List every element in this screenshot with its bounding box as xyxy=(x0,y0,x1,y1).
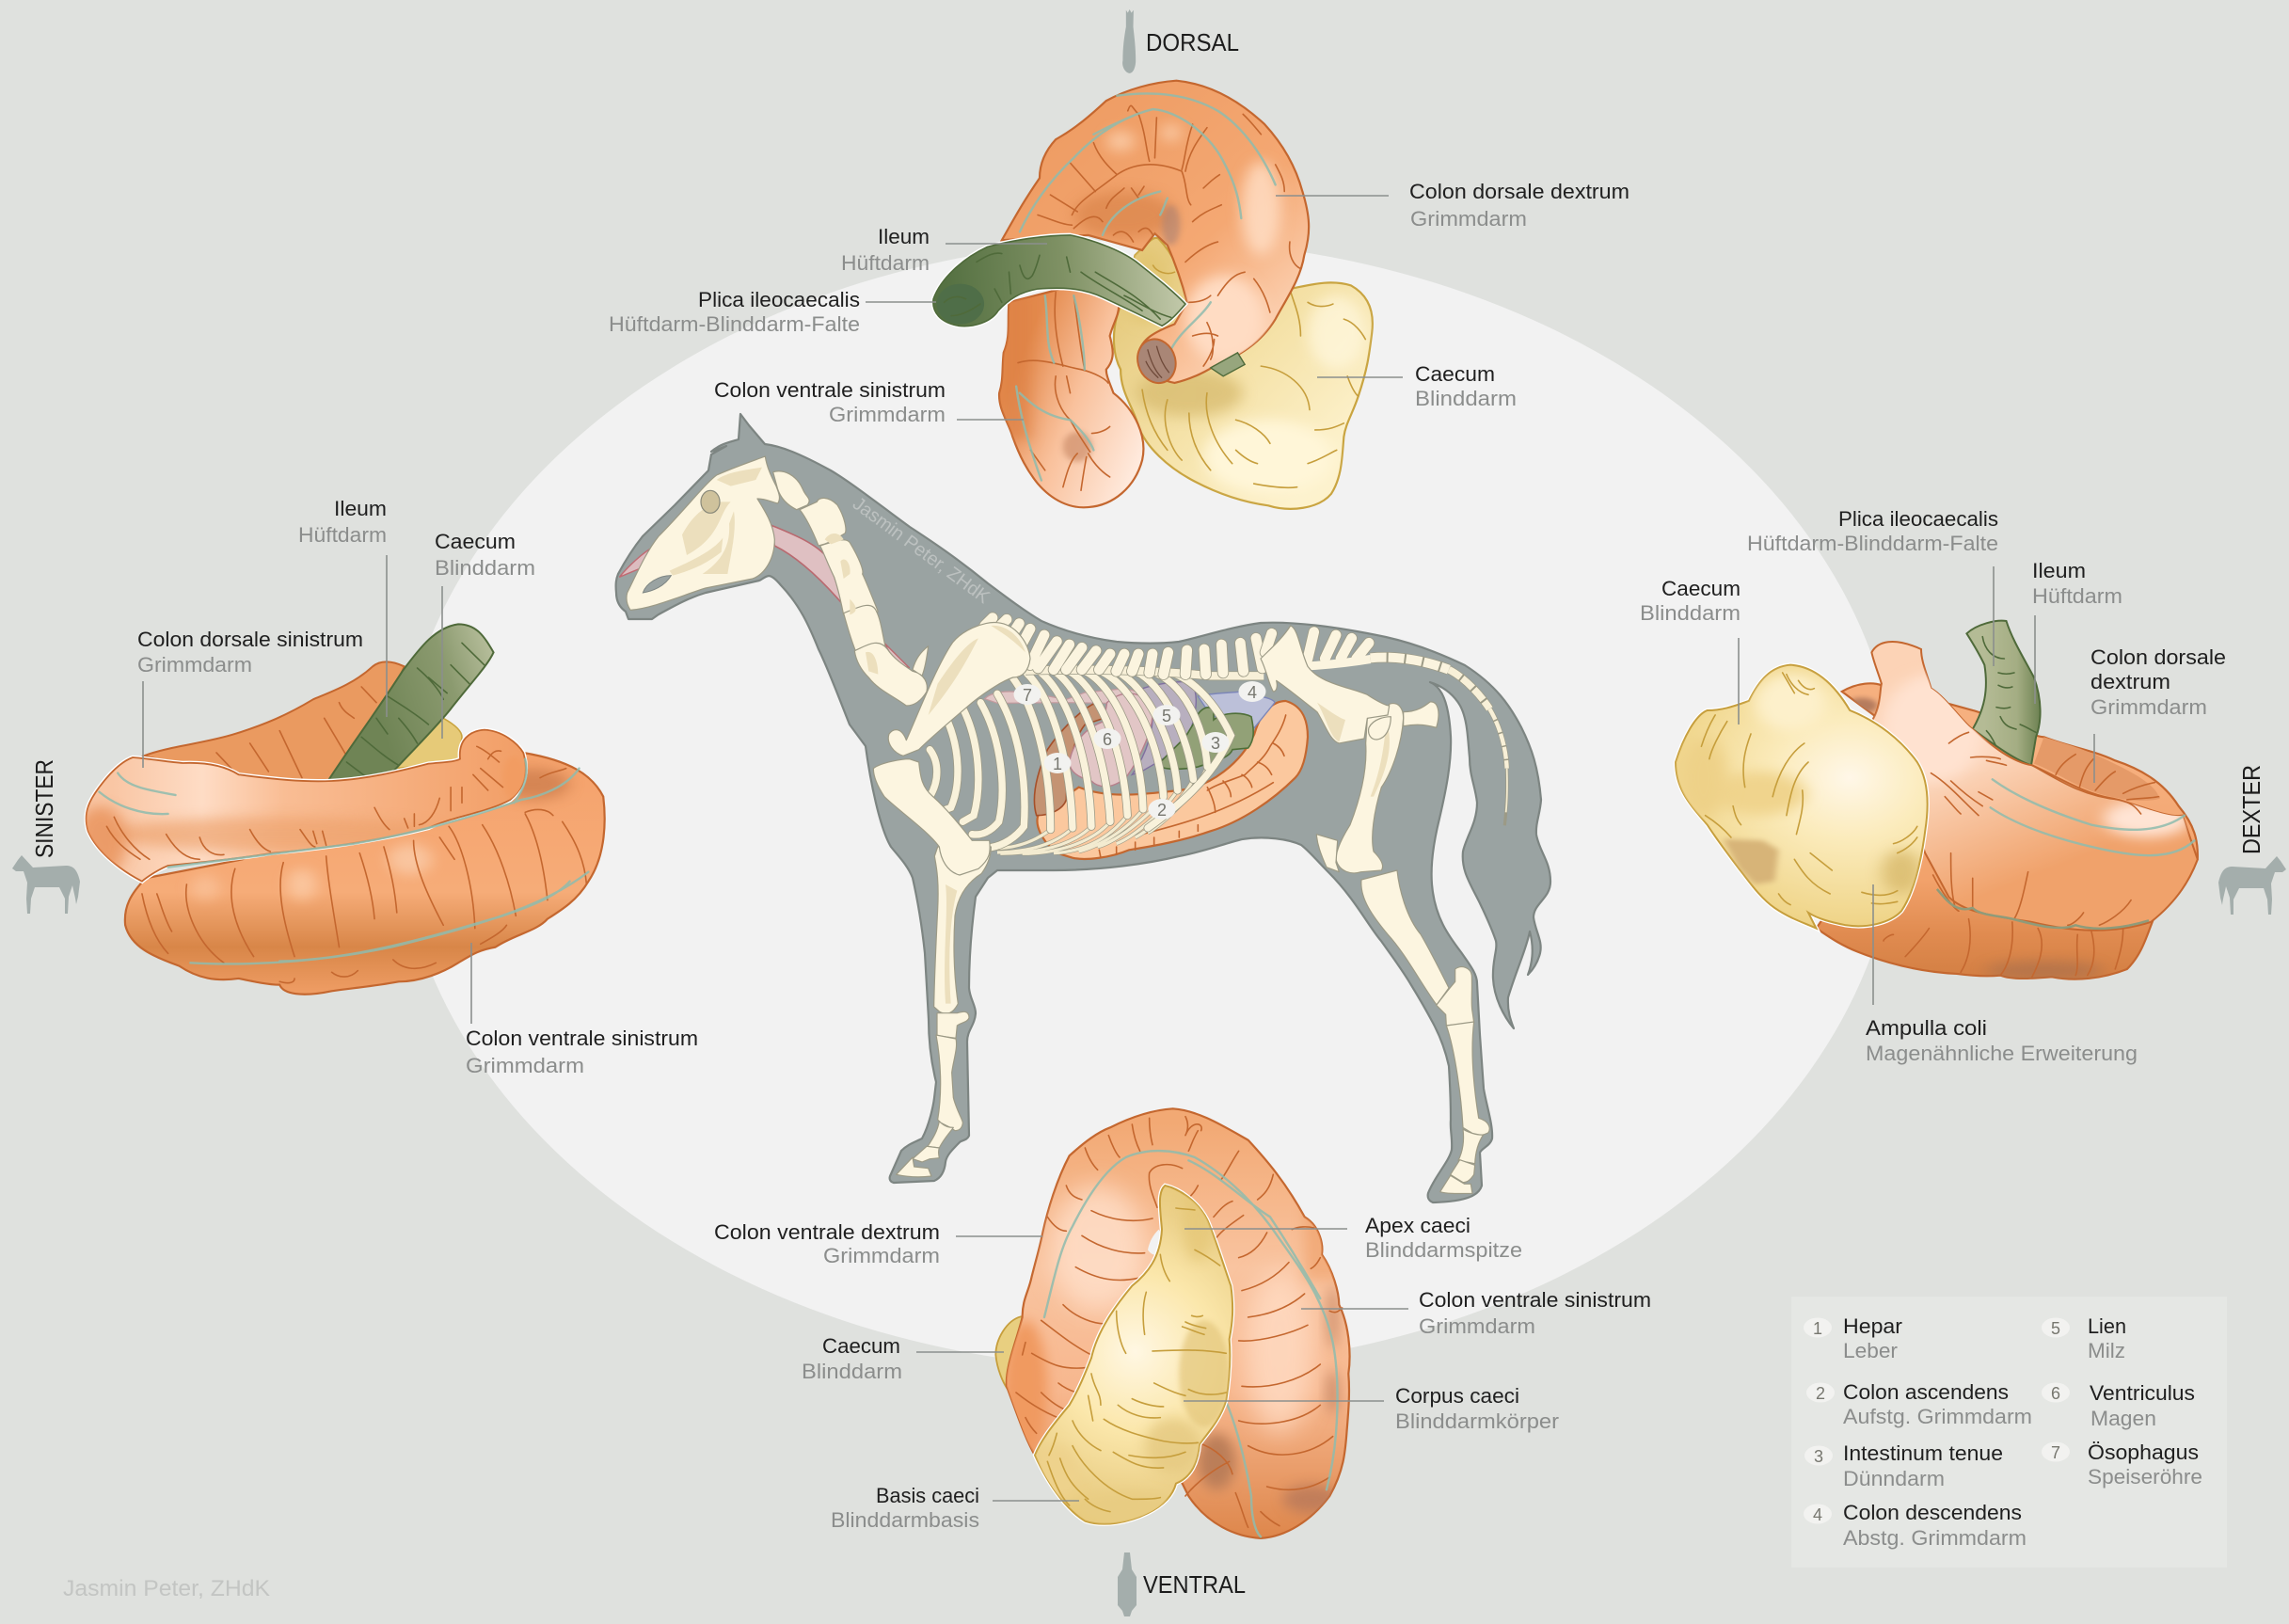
colon dorsale dextrum xyxy=(1002,81,1309,387)
leader: colon dorsale (dexter) xyxy=(2093,734,2095,783)
stomach xyxy=(1070,693,1152,787)
legend item 5 xyxy=(2042,1314,2126,1362)
icon: horse, dexter side xyxy=(2218,856,2286,915)
label: colon dorsale dextrum (dorsal): Grimmdarm xyxy=(1410,207,1527,231)
legend item 2 xyxy=(1806,1380,2032,1428)
leader: basis caeci xyxy=(993,1500,1079,1502)
label: caecum (ventral): Caecum xyxy=(822,1334,900,1358)
leader: ampulla coli xyxy=(1872,884,1874,1005)
heading: ventral: VENTRAL xyxy=(1143,1570,1246,1599)
colon ascendens xyxy=(1037,701,1308,859)
legend item 1: Hepar xyxy=(1843,1314,1902,1338)
central light ellipse xyxy=(397,240,1899,1369)
label: colon ventrale sinistrum (dorsal) xyxy=(714,378,946,426)
label: apex caeci: Apex caeci xyxy=(1365,1214,1470,1237)
thoracic vertebrae xyxy=(985,618,1264,676)
legend item 6: Ventriculus xyxy=(2090,1381,2195,1405)
legend item 4: Colon descendens xyxy=(1843,1501,2022,1524)
caecum, dorsal view xyxy=(1114,238,1373,509)
label: plica ileocaecalis (dexter): Plica ileocaecalis xyxy=(1838,507,1998,531)
front lower leg bones xyxy=(897,847,991,1177)
legend item 5: 5 xyxy=(2051,1319,2060,1338)
lumbar and tail vertebrae xyxy=(1265,632,1507,825)
pelvis and femur xyxy=(1261,626,1439,873)
label: plica ileocaecalis (dorsal): Plica ileocaecalis xyxy=(698,288,860,311)
ileum, dorsal view xyxy=(933,235,1185,326)
caecum, ventral view xyxy=(1035,1186,1232,1524)
label: ampulla coli xyxy=(1866,1016,2138,1065)
hind lower leg bones xyxy=(1437,967,1489,1194)
icon: horse, sinister side xyxy=(12,855,80,914)
colon opening xyxy=(1133,335,1181,387)
label: colon dorsale dextrum (dexter) xyxy=(2090,645,2226,719)
legend panel xyxy=(1791,1297,2227,1568)
label: colon dorsale sinistrum (sinister) xyxy=(137,628,363,677)
leader: apex caeci xyxy=(1184,1228,1347,1230)
label: colon ventrale sinistrum (ventral): Grimmdarm xyxy=(1419,1314,1535,1338)
colon ventrale sinistrum, dorsal view xyxy=(999,285,1143,507)
tibia xyxy=(1361,870,1449,1005)
rib cartilage xyxy=(994,767,1207,853)
label: colon dorsale dextrum (dorsal): Colon dorsale dextrum xyxy=(1409,180,1629,203)
label: ileum (dorsal): Hüftdarm xyxy=(841,251,930,275)
colon body, right view xyxy=(1816,683,2198,980)
label: colon dorsale dextrum (dorsal) xyxy=(1409,180,1629,231)
rear rim of colon xyxy=(144,661,405,784)
skull xyxy=(619,456,779,610)
numbered markers on the horse: 1 xyxy=(1053,755,1062,773)
label: ileum (dexter): Ileum xyxy=(2032,559,2086,582)
spleen xyxy=(1132,682,1196,774)
label: colon ventrale sinistrum (sinister): Grimmdarm xyxy=(466,1054,584,1077)
legend item 2: Colon ascendens xyxy=(1843,1380,2009,1404)
legend item 7: Ösophagus xyxy=(2088,1441,2199,1464)
legend item 1: 1 xyxy=(1813,1319,1822,1338)
label: caecum (ventral): Blinddarm xyxy=(802,1360,902,1383)
label: colon dorsale sinistrum (sinister): Grimmdarm xyxy=(137,653,252,677)
label: apex caeci xyxy=(1365,1214,1522,1262)
icon: horse from behind (dorsal) xyxy=(1122,9,1136,73)
legend item 5: Milz xyxy=(2088,1339,2125,1362)
numbered markers on the horse: 5 xyxy=(1162,707,1171,725)
organs and ribcage xyxy=(930,618,1308,859)
leader: ileum (sinister) xyxy=(386,555,388,717)
illustration: right lateral view of the colon xyxy=(1676,621,2198,980)
leader: caecum (dorsal) xyxy=(1317,376,1403,378)
label: corpus caeci xyxy=(1395,1384,1559,1433)
leader: plica (dexter) xyxy=(1993,566,1995,666)
illustration: ventral view of the colon xyxy=(995,1108,1367,1538)
label: plica ileocaecalis (dorsal): Hüftdarm-Blinddarm-Falte xyxy=(609,312,860,336)
label: caecum (ventral) xyxy=(802,1334,902,1383)
label: colon ventrale sinistrum (dorsal): Grimmdarm xyxy=(829,403,946,426)
numbered markers on the horse xyxy=(1014,681,1266,820)
legend item 6: 6 xyxy=(2051,1384,2060,1403)
legend item 7: 7 xyxy=(2051,1443,2060,1462)
label: caecum (dorsal) xyxy=(1415,362,1517,410)
scapula xyxy=(888,622,1030,756)
label: basis caeci: Basis caeci xyxy=(876,1484,979,1507)
leader: ileum (dorsal) xyxy=(946,243,1047,245)
label: colon ventrale dextrum (ventral): Grimmdarm xyxy=(823,1244,940,1267)
heading: dexter: DEXTER xyxy=(2237,765,2265,854)
liver xyxy=(1034,704,1105,816)
colon ventrale, ventral view xyxy=(1004,1108,1367,1538)
label: ileum (sinister): Ileum xyxy=(334,497,387,520)
heading: dorsal: DORSAL xyxy=(1146,28,1239,56)
colon dorsale dextrum, right view xyxy=(1871,642,2198,931)
label: ileum (sinister): Hüftdarm xyxy=(298,523,387,547)
legend item 3 xyxy=(1804,1441,2003,1490)
label: colon ventrale sinistrum (ventral) xyxy=(1419,1288,1651,1338)
label: caecum (dorsal): Caecum xyxy=(1415,362,1495,386)
label: colon dorsale dextrum (dexter): Grimmdarm xyxy=(2090,695,2207,719)
leader: colon ventrale (dorsal) xyxy=(957,419,1024,421)
label: colon ventrale sinistrum (sinister) xyxy=(466,1027,698,1077)
label: caecum (dexter) xyxy=(1640,577,1741,625)
label: ileum (dexter): Hüftdarm xyxy=(2032,584,2122,608)
small caecum lobe xyxy=(995,1316,1023,1388)
legend item 7 xyxy=(2042,1441,2202,1489)
leader: colon ventrale (sinister) xyxy=(470,943,472,1024)
legend item 6 xyxy=(2042,1381,2195,1430)
legend item 4: Abstg. Grimmdarm xyxy=(1843,1526,2027,1550)
illustration: dorsal view of the colon xyxy=(933,81,1373,509)
small intestine xyxy=(1157,708,1253,769)
heading: sinister: SINISTER xyxy=(30,759,58,858)
label: ileum (sinister) xyxy=(298,497,387,547)
colon ventrale sinistrum, left view xyxy=(125,753,605,995)
label: caecum (dexter): Caecum xyxy=(1661,577,1741,600)
leader: caecum (dexter) xyxy=(1738,638,1740,724)
credit: Jasmin Peter, ZHdK xyxy=(63,1576,270,1601)
label: caecum (dexter): Blinddarm xyxy=(1640,601,1741,625)
label: corpus caeci: Corpus caeci xyxy=(1395,1384,1519,1408)
legend item 2: 2 xyxy=(1816,1384,1825,1403)
pelvis xyxy=(1261,626,1390,743)
label: corpus caeci: Blinddarmkörper xyxy=(1395,1409,1559,1433)
ileum, left view xyxy=(328,624,494,784)
leader: caecum (ventral) xyxy=(916,1351,1004,1353)
caecum, left view xyxy=(395,718,462,769)
leader: ileum (dexter) xyxy=(2034,615,2036,704)
femur condyle xyxy=(1369,717,1391,740)
horse silhouette xyxy=(616,414,1550,1202)
numbered markers on the horse: 6 xyxy=(1103,730,1112,749)
legend item 4 xyxy=(1804,1501,2027,1550)
legend item 3: Dünndarm xyxy=(1843,1467,1945,1490)
legend item 7: Speiseröhre xyxy=(2088,1465,2202,1489)
label: colon ventrale sinistrum (sinister): Colon ventrale sinistrum xyxy=(466,1027,698,1050)
legend item 4: 4 xyxy=(1813,1505,1822,1524)
numbered markers on the horse: 3 xyxy=(1211,734,1220,753)
label: colon ventrale sinistrum (ventral): Colon ventrale sinistrum xyxy=(1419,1288,1651,1312)
leader: caecum (sinister) xyxy=(441,586,443,739)
gap between colon and caecum xyxy=(1148,1230,1162,1255)
illustration: horse with skeleton and organs xyxy=(616,414,1550,1202)
spike of first vertebra xyxy=(913,646,929,676)
leader: plica (dorsal) xyxy=(866,301,936,303)
humerus xyxy=(873,759,990,875)
label: colon dorsale sinistrum (sinister): Colon dorsale sinistrum xyxy=(137,628,363,651)
label: apex caeci: Blinddarmspitze xyxy=(1365,1238,1522,1262)
shoulder bones xyxy=(873,622,1030,875)
legend item 3: Intestinum tenue xyxy=(1843,1441,2003,1465)
label: ampulla coli: Ampulla coli xyxy=(1866,1016,1987,1040)
watermark on horse: Jasmin Peter, ZHdK xyxy=(849,493,993,608)
colon dorsale sinistrum, left view xyxy=(75,730,580,882)
ileum, right view xyxy=(1966,621,2041,765)
label: colon ventrale dextrum (ventral) xyxy=(714,1220,940,1267)
label: ampulla coli: Magenähnliche Erweiterung xyxy=(1866,1042,2138,1065)
icon: horse from the front (ventral) xyxy=(1118,1552,1137,1616)
leader: colon dorsale (sinister) xyxy=(142,681,144,768)
label: ileum (dorsal): Ileum xyxy=(878,225,930,248)
colon descendens xyxy=(1198,692,1275,727)
leader: colon ventrale sinistrum (ventral) xyxy=(1301,1308,1408,1310)
legend item 1 xyxy=(1804,1314,1902,1362)
oesophagus in thorax xyxy=(985,689,1141,703)
legend item 1: Leber xyxy=(1843,1339,1898,1362)
label: caecum (sinister): Blinddarm xyxy=(435,556,535,580)
leader: corpus caeci xyxy=(1184,1400,1384,1402)
caecum, right view xyxy=(1676,665,1928,929)
leader: colon ventrale dextrum (ventral) xyxy=(956,1235,1042,1237)
legend item 3: 3 xyxy=(1814,1447,1823,1466)
oesophagus in neck xyxy=(771,525,910,668)
label: plica ileocaecalis (dexter) xyxy=(1747,507,1998,555)
label: basis caeci: Blinddarmbasis xyxy=(831,1508,979,1532)
leader: colon dorsale dextrum (dorsal) xyxy=(1276,195,1389,197)
neck vertebrae xyxy=(773,471,927,706)
label: colon ventrale dextrum (ventral): Colon ventrale dextrum xyxy=(714,1220,940,1244)
femoral head xyxy=(1404,702,1439,727)
label: ileum (dexter) xyxy=(2032,559,2122,608)
numbered markers on the horse: 4 xyxy=(1248,683,1257,702)
label: colon dorsale dextrum (dexter): dextrum xyxy=(2090,670,2170,693)
numbered markers on the horse: 2 xyxy=(1157,801,1167,820)
patella xyxy=(1316,835,1339,872)
plica stub xyxy=(1211,353,1245,376)
label: caecum (sinister): Caecum xyxy=(435,530,516,553)
ribs xyxy=(930,671,1231,848)
illustration: left lateral view of the colon xyxy=(75,624,605,995)
label: colon dorsale dextrum (dexter): Colon dorsale xyxy=(2090,645,2226,669)
legend item 2: Aufstg. Grimmdarm xyxy=(1843,1405,2032,1428)
label: colon ventrale sinistrum (dorsal): Colon ventrale sinistrum xyxy=(714,378,946,402)
legend item 6: Magen xyxy=(2090,1407,2156,1430)
label: caecum (sinister) xyxy=(435,530,535,580)
numbered markers on the horse: 7 xyxy=(1023,686,1032,705)
label: ileum (dorsal) xyxy=(841,225,930,275)
label: plica ileocaecalis (dexter): Hüftdarm-Blinddarm-Falte xyxy=(1747,532,1998,555)
label: caecum (dorsal): Blinddarm xyxy=(1415,387,1517,410)
label: basis caeci xyxy=(831,1484,979,1532)
legend item 5: Lien xyxy=(2088,1314,2126,1338)
label: plica ileocaecalis (dorsal) xyxy=(609,288,860,336)
femur xyxy=(1336,704,1404,873)
